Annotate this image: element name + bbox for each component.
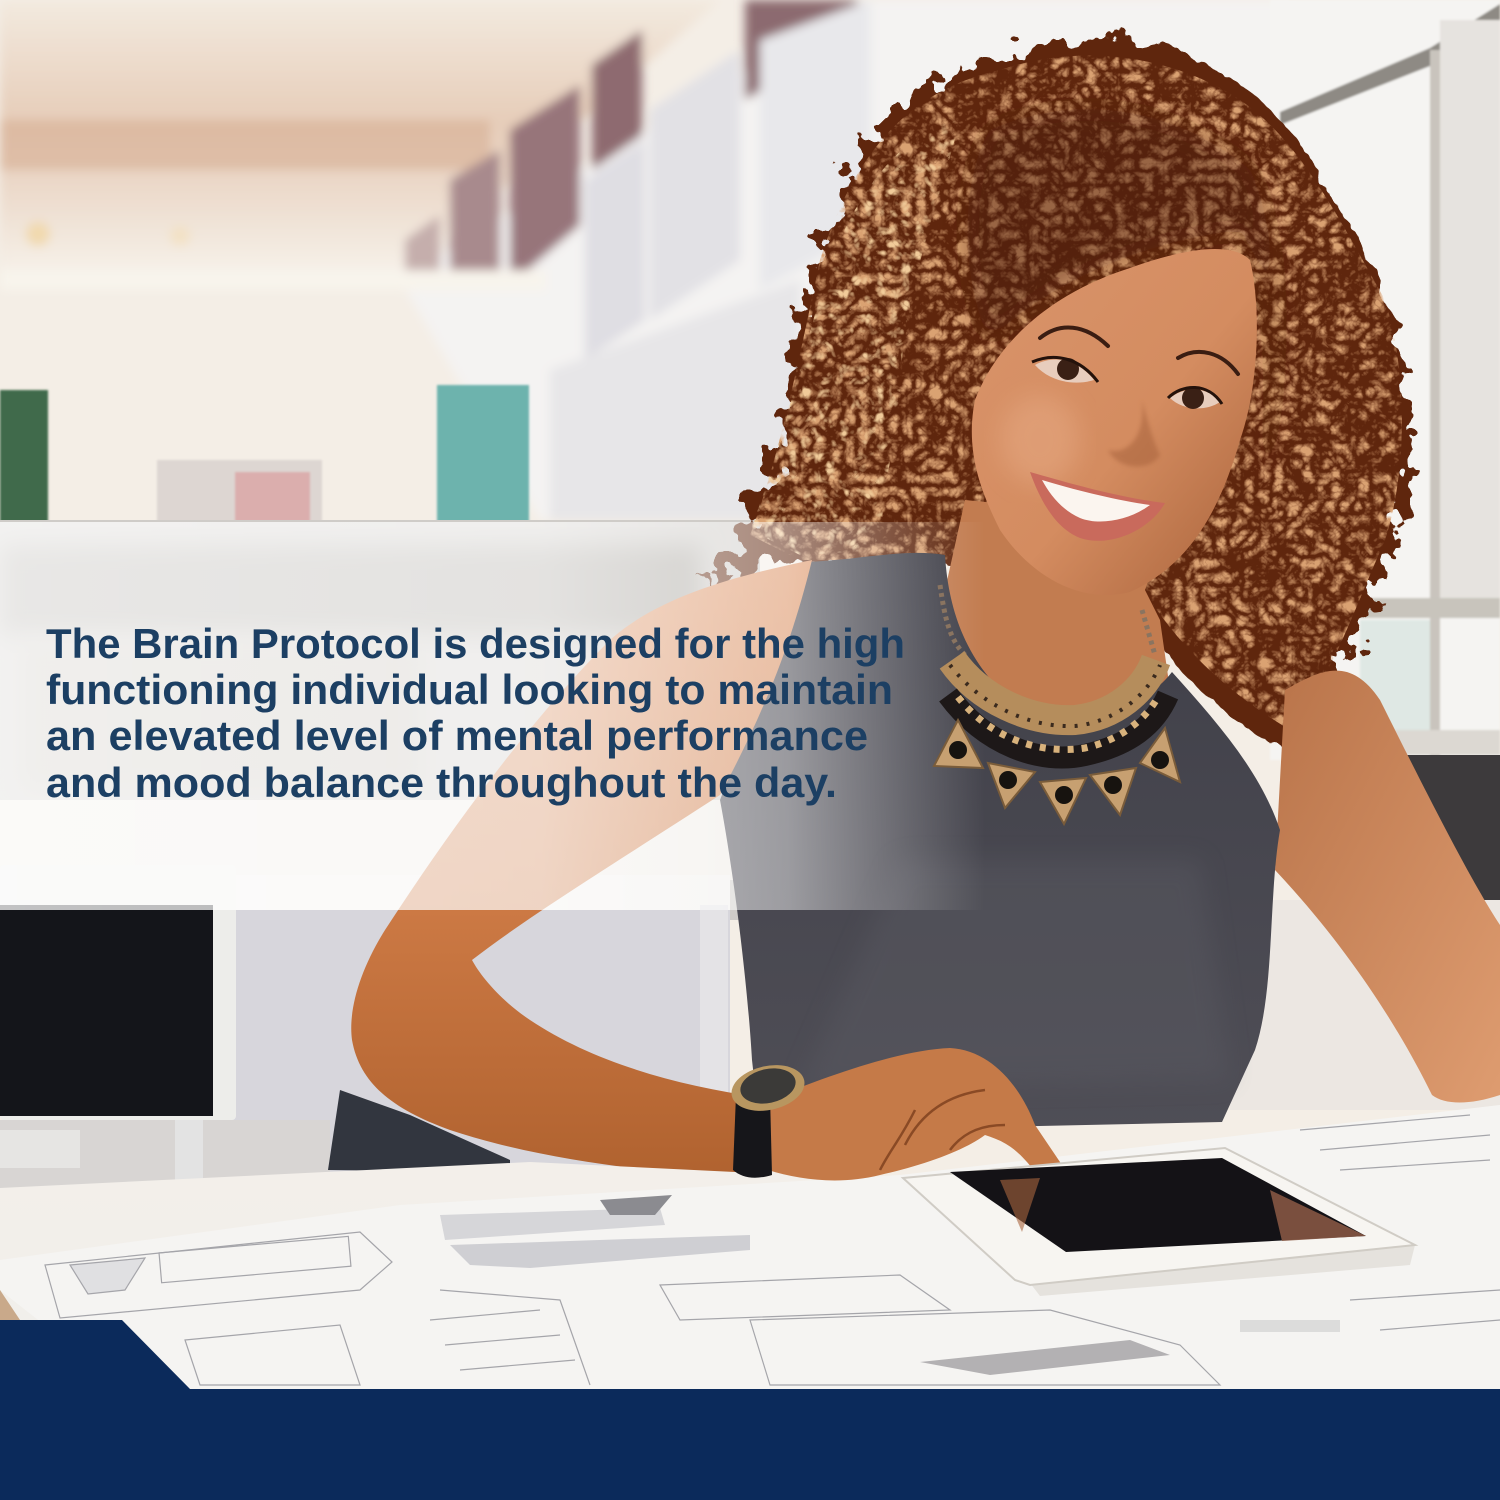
tablet [903,1148,1415,1296]
partition and desk area behind arm [0,520,760,1200]
translucent white text band [0,522,985,910]
navy footer banner [0,1320,1500,1500]
woman: sleeveless grey top [720,553,1280,1132]
lower-right chair and wall [1230,900,1500,1110]
wall panels [0,385,529,525]
smile [1030,472,1165,541]
desk phone [328,1090,510,1172]
tablet screen [950,1158,1366,1252]
right dark monitor [1405,755,1500,940]
back-left computer monitor [0,865,330,1195]
text block: an elevated level of mental performance [46,712,868,759]
blueprint drawings [45,1115,1500,1385]
text block: and mood balance throughout the day. [46,759,837,806]
eyes [1032,357,1222,409]
right windows [1270,0,1500,760]
woman: curly hair [705,39,1411,741]
soft background shapes [0,0,1290,520]
text block: The Brain Protocol is designed for the high [46,620,905,667]
eyebrows [1040,328,1238,374]
text block: functioning individual looking to maintain [46,666,893,713]
woman: bent left arm [351,560,812,1178]
woman: neck and chest [935,500,1170,745]
text block [46,620,905,806]
woman: raised right arm [1275,671,1500,1102]
hand [768,1048,1062,1180]
finger creases [880,1090,1005,1170]
necklace [934,585,1180,824]
nose [1108,400,1160,466]
wristwatch [727,1059,809,1178]
woman: face [972,249,1257,595]
cheek highlight [1000,395,1080,485]
desk with blueprints [0,1105,1500,1400]
pendants [934,720,1180,824]
